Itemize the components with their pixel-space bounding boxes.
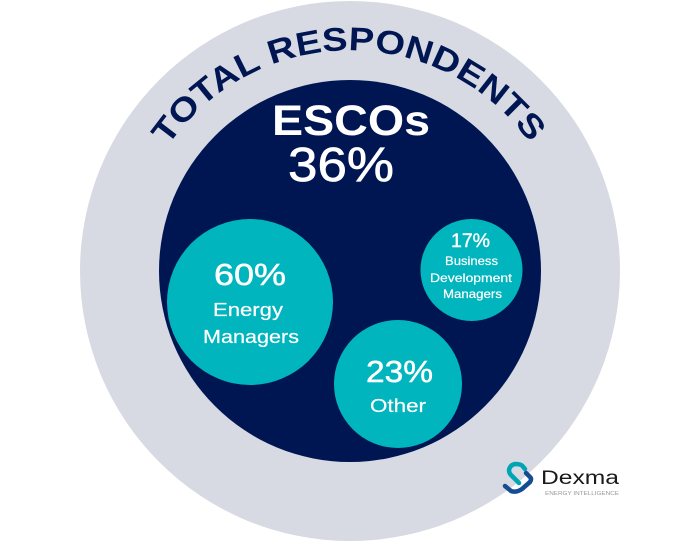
outer circle: total respondents [80, 1, 620, 541]
bubble: business development managers: 17% [451, 231, 490, 252]
logo: Dexma [505, 464, 620, 497]
ESCOs label: ESCOs [272, 97, 430, 145]
bubble: other: 23% [366, 354, 433, 389]
bubble: energy managers [167, 219, 333, 385]
wordmark: Dexma [541, 468, 620, 489]
inner circle: ESCOs [159, 80, 541, 462]
bubble: business development managers: Managers [443, 287, 502, 301]
bubble: business development managers [420, 219, 522, 321]
bubble: energy managers: 60% [214, 257, 286, 292]
bubble: energy managers: Energy [213, 300, 283, 320]
bubble: business development managers: Development [430, 271, 513, 285]
icon: Dexma mark [505, 464, 531, 492]
tagline: ENERGY INTELLIGENCE [545, 491, 619, 497]
bubble: other: Other [370, 396, 426, 416]
ESCOs percentage: 36% [288, 139, 394, 192]
curved heading: total respondents: TOTAL RESPONDENTS [150, 28, 544, 139]
bubble: energy managers: Managers [203, 327, 299, 347]
bubble: business development managers: Business [445, 254, 498, 268]
bubble: other [334, 320, 462, 448]
